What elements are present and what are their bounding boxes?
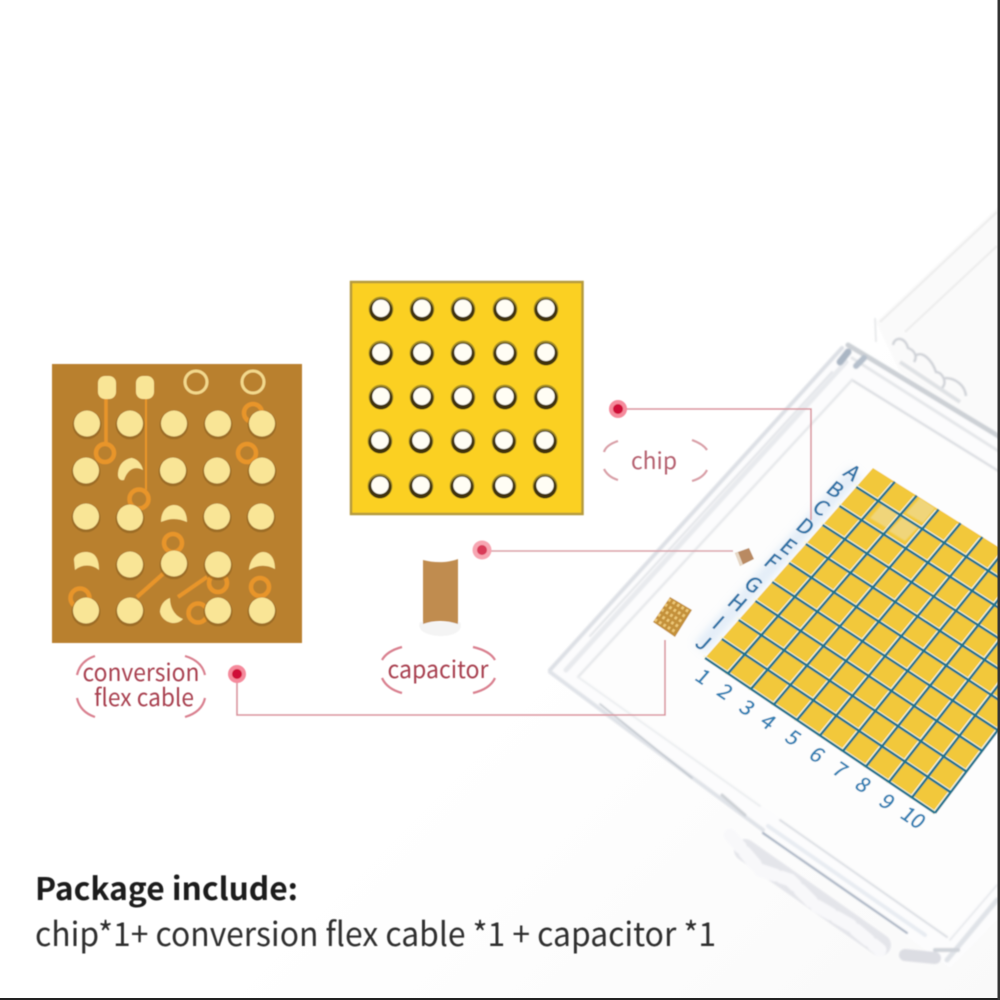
label: chip: chip (631, 442, 677, 476)
grid row letters: H (721, 587, 754, 618)
top hinge (893, 339, 966, 402)
grid row letters: D (790, 511, 822, 542)
bottom hinge (722, 795, 935, 958)
grid highlight lines (704, 485, 1000, 811)
grid column numbers (689, 662, 933, 835)
letter glow (700, 472, 856, 648)
label: capacitor: capacitor (388, 650, 489, 685)
plastic storage box (548, 205, 1000, 968)
box frame lines (550, 345, 1000, 960)
crescent pads (74, 458, 275, 623)
top row rings (185, 371, 264, 393)
connector: capacitor (472, 540, 733, 560)
grid row letters: F (758, 547, 787, 576)
flex cable board (52, 364, 302, 643)
grid column numbers: 3 (733, 693, 762, 722)
grid row letters (689, 457, 868, 657)
grid column numbers: 6 (803, 740, 832, 769)
grid lines (705, 482, 1000, 813)
heading: package include: Package include: (35, 864, 298, 909)
label: conversion flex cable (77, 653, 205, 717)
capacitor (419, 559, 461, 636)
box lid back (876, 205, 1000, 440)
grid row letters: A (837, 457, 868, 487)
grid column numbers: 10 (894, 799, 933, 835)
text: package contents: chip*1+ conversion flex cable *1 + capacitor *1 (35, 908, 716, 956)
grid column numbers: 9 (873, 787, 902, 816)
label: conversion flex cable: flex cable (94, 678, 194, 713)
grid column numbers: 4 (754, 707, 783, 736)
small capacitor in box (735, 548, 754, 566)
connector: chip (609, 400, 811, 520)
grid column numbers: 7 (826, 755, 855, 784)
label: chip (604, 440, 707, 481)
label: conversion flex cable: conversion (82, 653, 200, 688)
top row pads (98, 376, 154, 399)
round pads (72, 410, 276, 626)
grid column numbers: 8 (849, 770, 878, 799)
yellow chip (351, 282, 582, 514)
grid row letters: G (738, 569, 770, 600)
grid row letters: E (774, 532, 804, 561)
orange traces and rings (70, 398, 269, 622)
grid row letters: J (689, 628, 718, 657)
grid row letters: B (820, 474, 851, 504)
grid column numbers: 1 (689, 662, 718, 691)
grid row letters: C (806, 492, 837, 522)
yellow test grid (689, 457, 1000, 835)
solder holes (368, 297, 558, 498)
grid column numbers: 2 (711, 677, 740, 706)
grid column numbers: 5 (779, 723, 808, 752)
connector: flex cable (228, 640, 665, 715)
washed out cells (870, 498, 935, 541)
box body (548, 343, 1000, 968)
grid row letters: I (706, 609, 731, 635)
small chip in box (653, 597, 692, 637)
